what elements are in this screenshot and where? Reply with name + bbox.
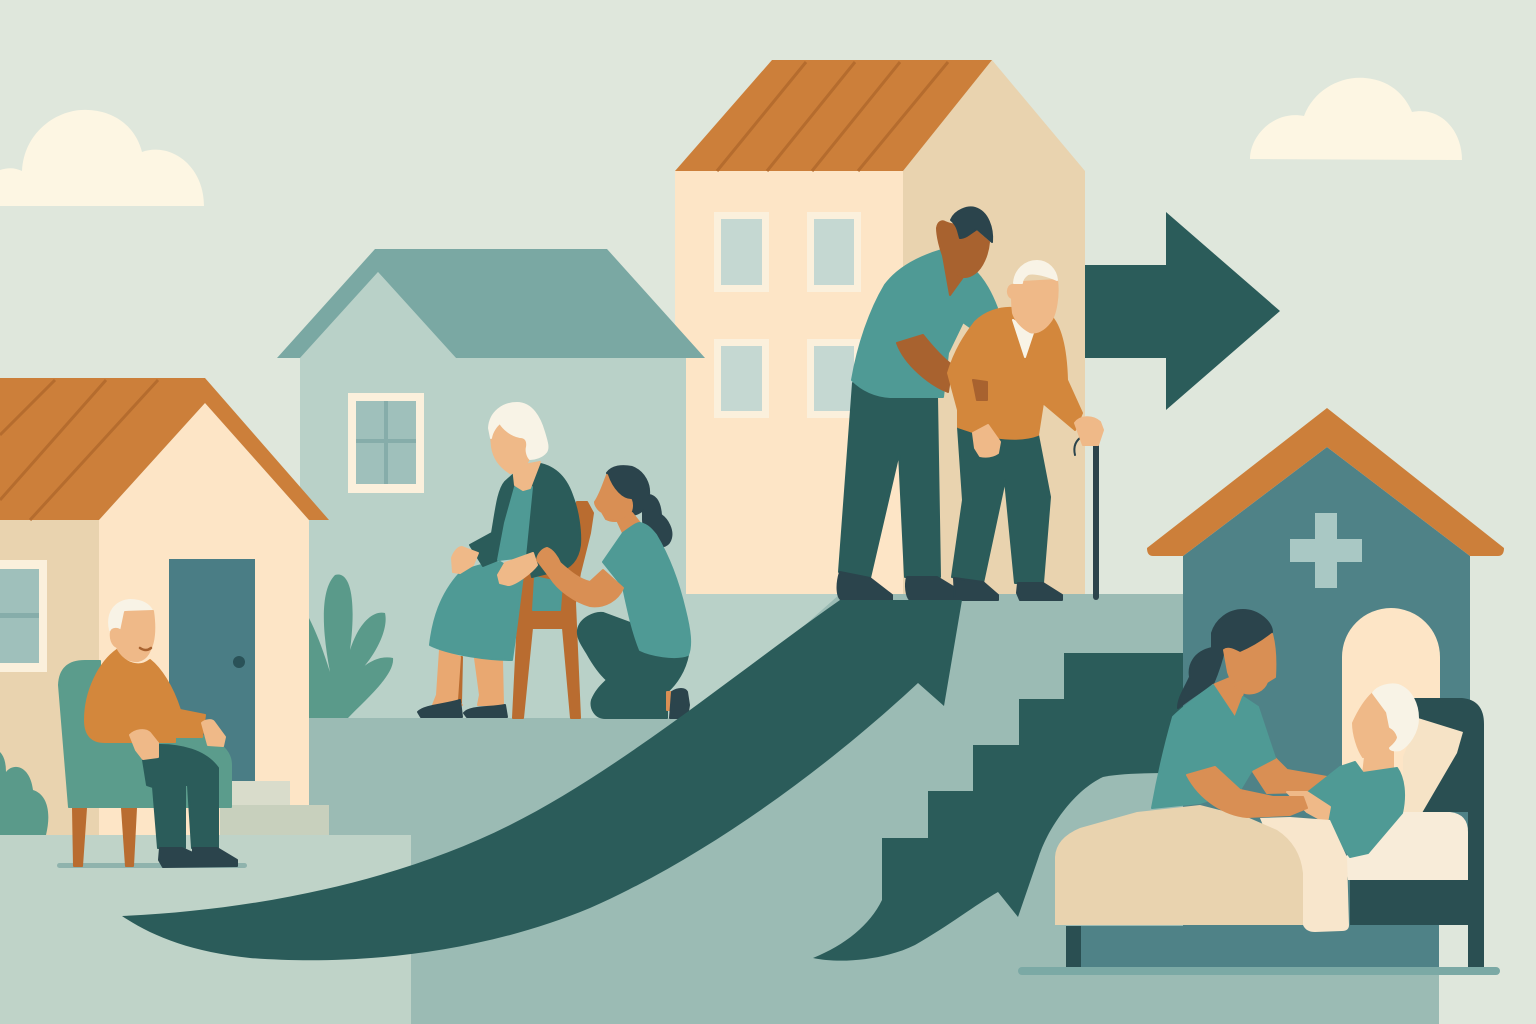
ground: terrace strip beside middle house — [686, 594, 840, 718]
house: large apartment building — [675, 60, 1085, 594]
arm — [537, 548, 623, 606]
figure: patient in bed — [1287, 684, 1418, 857]
shoes — [954, 578, 998, 600]
bush — [0, 752, 48, 835]
sweater — [948, 308, 1082, 439]
figure: kneeling nurse — [537, 466, 690, 718]
back arm — [1252, 758, 1327, 793]
cardigan — [470, 463, 580, 577]
shirt — [1152, 685, 1275, 808]
legs — [433, 650, 462, 705]
nurse hand on arm — [973, 380, 987, 400]
blanket — [1055, 805, 1349, 932]
shoes — [418, 700, 462, 717]
windows: large building — [714, 212, 861, 418]
cross — [1290, 513, 1362, 588]
trousers — [839, 383, 940, 578]
hands — [452, 547, 478, 573]
face — [1353, 693, 1398, 757]
steps — [220, 781, 329, 835]
hair — [1178, 610, 1272, 708]
bed frame — [1066, 698, 1484, 967]
hair — [1373, 684, 1418, 750]
shoes — [159, 848, 237, 867]
neck — [1363, 750, 1393, 774]
roof: clinic — [1147, 408, 1504, 556]
cloud: left — [0, 110, 204, 206]
shirt collar — [1013, 320, 1033, 357]
hair — [951, 208, 992, 242]
house: left home — [0, 378, 329, 835]
arrow: top right — [1085, 212, 1280, 410]
bed base pad — [1022, 773, 1170, 915]
figure: seated man in armchair — [57, 600, 247, 868]
plant — [309, 575, 393, 718]
neck — [1213, 677, 1243, 718]
figure: seated elderly woman on chair — [418, 403, 593, 718]
ground terraces — [0, 594, 1439, 1024]
arm — [897, 335, 952, 392]
head — [1008, 280, 1058, 333]
face — [595, 475, 632, 521]
shoes — [838, 572, 892, 600]
figure: elderly man with cane — [948, 261, 1103, 600]
house: middle blue-green house — [277, 249, 705, 718]
figure: standing nurse — [838, 208, 997, 600]
window: left home — [0, 560, 47, 672]
head — [111, 611, 154, 661]
trousers — [143, 745, 218, 848]
hands — [973, 425, 1000, 457]
cane — [1074, 436, 1099, 600]
chair — [513, 502, 593, 718]
roof: large building — [675, 60, 992, 171]
face — [491, 423, 530, 473]
arrow: sweeping curved — [122, 600, 962, 960]
head — [937, 221, 989, 277]
trousers — [578, 613, 688, 718]
hands — [130, 730, 158, 759]
blouse — [498, 487, 532, 560]
shirt — [603, 523, 690, 657]
arrow: stair-stepped — [813, 653, 1183, 961]
ankle and shoe — [667, 692, 672, 710]
hand — [1287, 792, 1330, 823]
cloud: right — [1250, 78, 1462, 160]
smile — [140, 648, 151, 650]
neck — [617, 513, 640, 533]
gown — [1307, 762, 1404, 857]
roof: left home — [0, 378, 329, 520]
window: middle house — [348, 393, 424, 493]
hair — [1014, 261, 1057, 283]
trousers — [952, 427, 1050, 583]
ground shadow — [57, 863, 247, 868]
armchair — [59, 661, 231, 866]
nurse front arm — [1187, 767, 1307, 817]
ground shadow: bed — [1018, 967, 1500, 975]
skirt — [430, 562, 523, 660]
clinic building — [1081, 408, 1504, 975]
neck — [942, 250, 963, 295]
door: left home — [169, 559, 255, 781]
face — [1224, 634, 1275, 693]
shirt — [852, 250, 997, 397]
figure: nurse at bedside — [1152, 610, 1327, 808]
bed mattress and pillow — [1345, 718, 1468, 880]
hair — [489, 403, 547, 459]
neck — [513, 462, 540, 490]
roof: middle house — [277, 249, 705, 358]
hair — [607, 466, 671, 546]
hair — [109, 600, 152, 630]
sweater — [85, 650, 205, 742]
arched doorway — [1342, 608, 1440, 780]
